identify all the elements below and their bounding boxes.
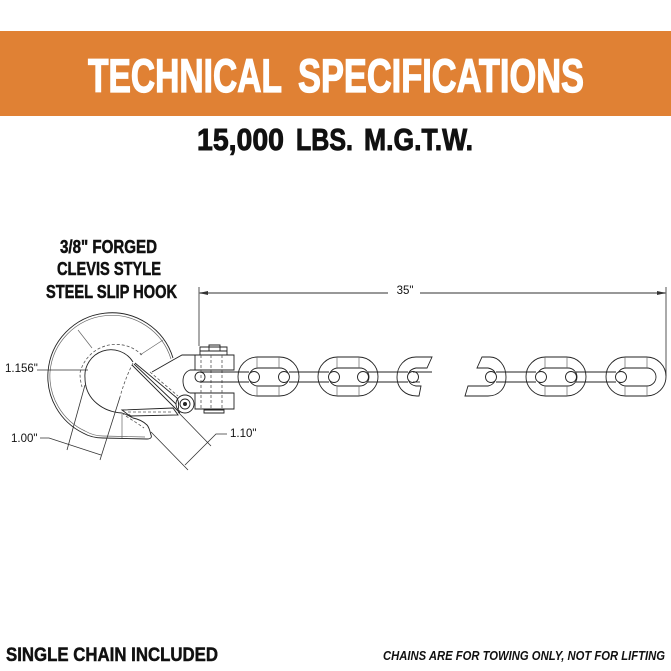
dimension: 1.156 inches <box>5 363 88 375</box>
chain links <box>195 357 666 396</box>
connecting bars <box>200 372 616 382</box>
hook body <box>48 313 173 439</box>
dimension: 1.10 inches: 1.10" <box>230 428 256 440</box>
link 4 <box>606 357 666 396</box>
broken link right <box>465 357 506 396</box>
title: TECHNICAL <box>88 49 282 102</box>
subtitle: capacity: M.G.T.W. <box>364 122 473 157</box>
subtitle: capacity: 15,000 <box>197 122 284 157</box>
link 3 <box>526 357 586 396</box>
link 2 <box>318 357 378 396</box>
header banner <box>0 31 671 116</box>
clevis <box>183 345 234 413</box>
hook label: STEEL SLIP HOOK <box>46 282 177 302</box>
hinge pin <box>176 395 194 413</box>
hook label <box>46 237 177 302</box>
latch <box>132 363 180 413</box>
footnote: single chain: SINGLE CHAIN INCLUDED <box>6 644 218 666</box>
slip hook drawing <box>48 313 195 439</box>
length dimension: 35 inches <box>199 285 666 376</box>
link 1 <box>238 357 299 396</box>
dimension: 1.10 inches <box>151 412 256 470</box>
hook label: CLEVIS STYLE <box>57 259 161 279</box>
subtitle: capacity: LBS. <box>296 122 353 157</box>
dimension: 1.156 inches: 1.156" <box>5 363 38 375</box>
dimension: 1.00 inch: 1.00" <box>11 433 37 445</box>
broken link left <box>397 357 432 396</box>
dimension: 1.00 inch <box>11 385 120 460</box>
hook label: 3/8" FORGED <box>60 237 157 257</box>
length dimension: 35 inches: 35" <box>397 285 413 297</box>
